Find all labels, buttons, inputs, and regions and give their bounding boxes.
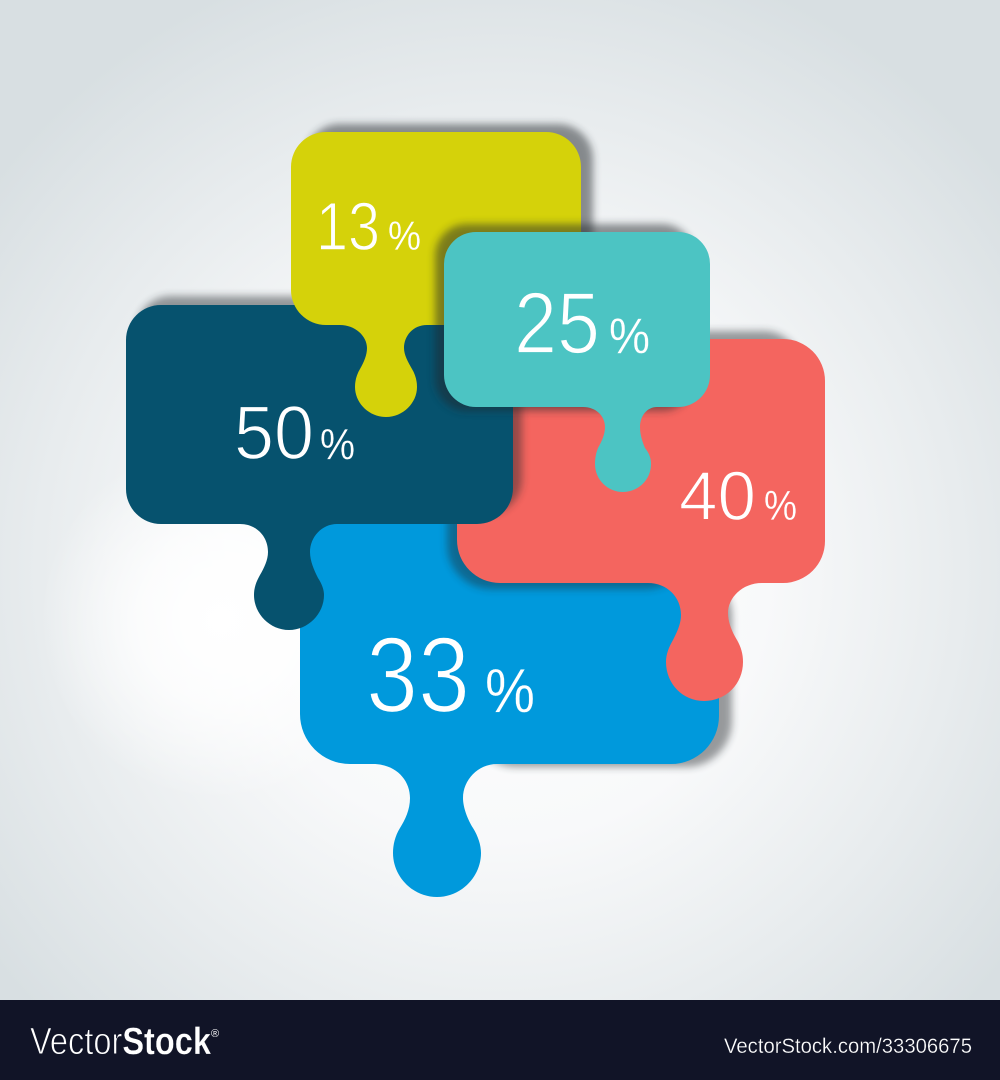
footer bar	[0, 1000, 1000, 1080]
label: 13%: 13	[316, 188, 380, 265]
label: 33%: 33	[366, 614, 470, 735]
label: 40%: 40	[679, 457, 756, 535]
label: 25%: %	[609, 308, 650, 364]
panel: teal 25%	[435, 224, 710, 492]
label: 13%: %	[388, 213, 421, 259]
label: 40%	[679, 457, 797, 535]
panel: yellow 13%	[291, 124, 593, 417]
label: 33%: %	[485, 657, 535, 726]
label: 25%: 25	[514, 275, 600, 372]
panel: coral 40%	[447, 331, 825, 701]
panel: dark blue 50%	[126, 296, 522, 630]
label: 50%: 50	[234, 391, 314, 476]
logo: registered mark: ®	[211, 1028, 219, 1040]
logo: VectorStock: VectorStock	[30, 1021, 212, 1063]
panel: blue 33%	[300, 524, 732, 897]
label: 50%	[234, 391, 355, 476]
image id: VectorStock.com/33306675	[724, 1035, 972, 1058]
label: 40%: %	[764, 482, 797, 529]
label: 50%: %	[320, 420, 355, 469]
